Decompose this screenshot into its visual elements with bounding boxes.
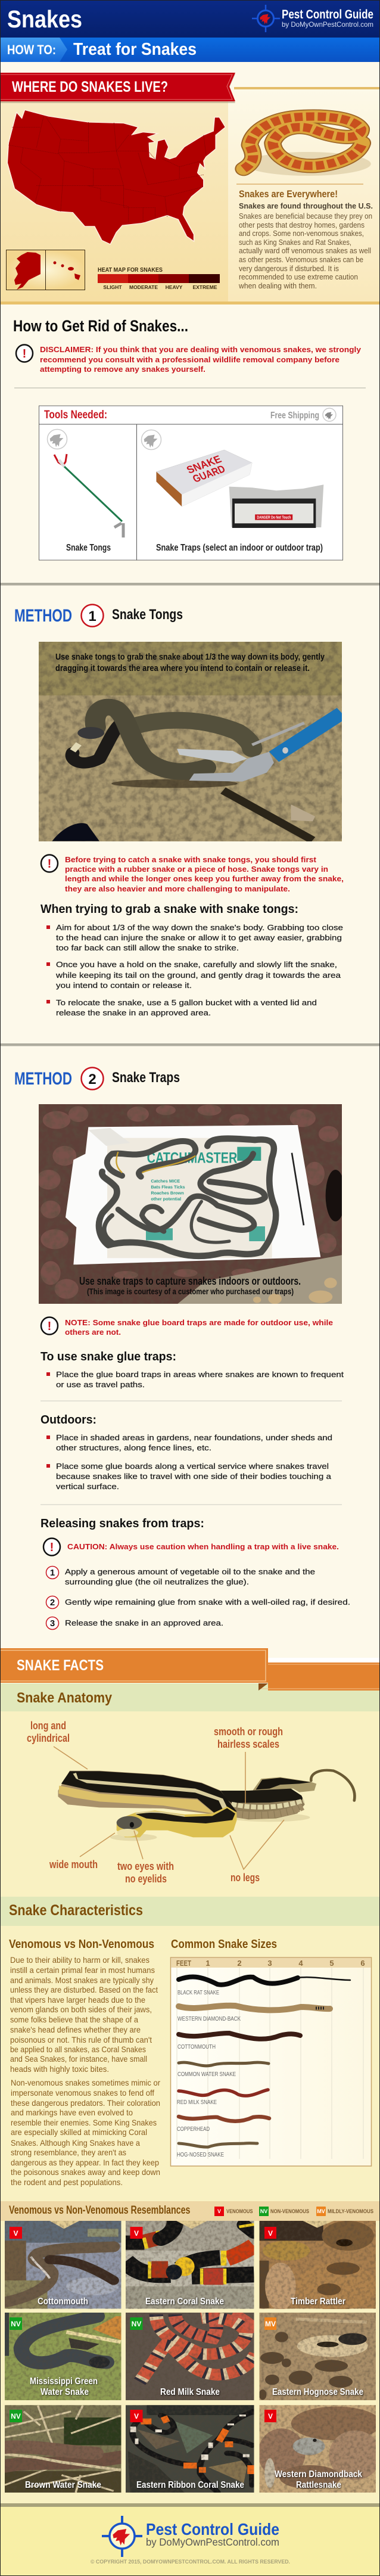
text block: snakes are everywhere: actually ward off venomous snakes as well: [239, 247, 371, 255]
photo: eastern coral snake: [126, 2221, 254, 2309]
footer: [0, 2503, 380, 2576]
disclaimer: [16, 344, 362, 374]
chart axis: feet: FEET: [176, 1959, 191, 1968]
legend: heat map: [98, 266, 220, 290]
disclaimer: attempting to remove any snakes yourself.: [40, 365, 205, 374]
text block: venomous vs non-venomous: resemble their enemies. Some King Snakes: [11, 2118, 157, 2127]
heading ribbon: snake facts: SNAKE FACTS: [17, 1657, 104, 1674]
legend: heat map: MODERATE: [129, 284, 158, 290]
text block: snakes are everywhere: when dealing with them.: [238, 282, 317, 290]
text block: venomous vs non-venomous: Due to their ability to harm or kill, snakes: [10, 1955, 149, 1965]
photo: snake glue trap: CATCHMASTER: [147, 1149, 237, 1166]
callouts: anatomy labels: no legs: [231, 1872, 260, 1884]
snake bar: hog-nosed snake: [177, 2143, 257, 2158]
panel: tools needed: Snake Traps (select an indoor or outdoor trap): [156, 543, 323, 553]
logo: footer: Pest Control Guide: [146, 2520, 279, 2538]
callouts: anatomy labels: cylindrical: [27, 1732, 70, 1744]
panel: tools needed: [39, 406, 343, 560]
method 1 heading: [14, 604, 183, 627]
callouts: anatomy labels: long and: [30, 1720, 66, 1732]
body: [58, 1771, 305, 1819]
photo caption: (This image is courtesy of a customer who purchased our traps): [87, 1287, 294, 1296]
chart axis: feet: 4: [298, 1959, 303, 1968]
text block: venomous vs non-venomous: and Sea Snakes, for instance, have small: [10, 2054, 147, 2064]
text block: releasing snakes: 1: [50, 1568, 55, 1578]
chart axis: feet: 2: [237, 1959, 242, 1968]
photo: brown water snake: NV: [11, 2412, 21, 2420]
legend: heat map: SLIGHT: [103, 284, 122, 290]
text block: venomous vs non-venomous: dangerous as they appear. In fact they keep: [11, 2158, 159, 2167]
snake bar: red milk snake: [177, 2090, 268, 2106]
photo: snake glue trap: Roaches Brown: [151, 1190, 184, 1195]
panel: snake characteristics: Snake Characteristics: [9, 1902, 143, 1919]
text block: snakes are everywhere: such as King Snakes and Rat Snakes,: [239, 238, 351, 247]
callouts: anatomy labels: two eyes with: [117, 1860, 174, 1872]
text block: snakes are everywhere: very dangerous if disturbed. It is: [239, 265, 339, 273]
heading: snake anatomy: Snake Anatomy: [17, 1690, 113, 1706]
text block: releasing snakes: Gently wipe remaining glue from snake with a well-oiled rag, if desired.: [65, 1598, 350, 1606]
photo caption: Use snake traps to capture snakes indoors or outdoors.: [79, 1275, 301, 1287]
text block: tongs instructions: release the snake in an approved area.: [56, 1008, 211, 1017]
chart axis: feet: 3: [267, 1959, 272, 1968]
photo: brown water snake: Brown Water Snake: [25, 2480, 101, 2490]
chart axis: feet: 1: [205, 1959, 210, 1968]
head and neck: [117, 1807, 236, 1837]
text block: venomous vs non-venomous: [10, 1955, 160, 2187]
text block: outdoors: [41, 1413, 332, 1491]
text block: releasing snakes: surrounding glue (the oil neutralizes the glue).: [65, 1577, 249, 1586]
text block: to use glue traps: [41, 1350, 344, 1389]
panel: tools needed: Tools Needed:: [44, 409, 107, 421]
panel: snake characteristics: Common Snake Sizes: [171, 1938, 277, 1951]
snake bar: common water snake: COMMON WATER SNAKE: [177, 2071, 236, 2078]
method 2 heading: Snake Traps: [112, 1070, 180, 1086]
heading ribbon: snake facts: [0, 1648, 380, 1691]
icon: free shipping seal: [323, 408, 336, 421]
text block: venomous vs non-venomous: and markings have even evolved to: [11, 2108, 133, 2117]
photo: timber rattler: Timber Rattler: [291, 2297, 345, 2307]
text block: outdoors: Outdoors:: [41, 1413, 96, 1427]
text block: venomous vs non-venomous: venom glands on both sides of their jaws,: [10, 2005, 152, 2014]
photo: red milk snake: Red Milk Snake: [160, 2387, 220, 2397]
disclaimer: recommend you consult with a professional wildlife removal company before: [40, 355, 339, 364]
text block: venomous vs non-venomous: poisonous or not. This rule of thumb can't: [10, 2035, 152, 2044]
product: snake trap box and bag: [157, 450, 323, 528]
text block: venomous vs non-venomous: be applied to all snakes, as Coral Snakes: [10, 2044, 146, 2054]
text block: snakes are everywhere: Snakes are beneficial because they prey on: [239, 212, 372, 220]
header bar: [0, 0, 380, 38]
snake bar: red milk snake: RED MILK SNAKE: [177, 2099, 217, 2106]
photo: snake glue trap: Bats Fleas Ticks: [151, 1184, 185, 1189]
copyright: © COPYRIGHT 2015, DOMYOWNPESTCONTROL.COM. ALL RIGHTS RESERVED.: [91, 2559, 290, 2565]
text block: releasing snakes: Apply a generous amount of vegetable oil to the snake and the: [65, 1567, 315, 1576]
photo: eastern coral snake: V: [134, 2229, 139, 2238]
photo: cottonmouth: [5, 2221, 122, 2309]
snake bar: western diamond-back: WESTERN DIAMOND-BACK: [177, 2016, 241, 2022]
snake bar: cottonmouth: COTTONMOUTH: [177, 2044, 216, 2050]
text block: venomous vs non-venomous: Non-venomous snakes sometimes mimic or: [11, 2078, 160, 2087]
text block: releasing snakes: Releasing snakes from traps:: [41, 1517, 204, 1530]
snake bar: common water snake: [177, 2062, 269, 2078]
product: snake trap box and bag: SNAKE: [185, 453, 224, 476]
text block: releasing snakes: 3: [50, 1618, 55, 1629]
logo: footer: by DoMyOwnPestControl.com: [146, 2536, 279, 2548]
photo: red milk snake: [126, 2313, 256, 2400]
panel: where do snakes live: [0, 73, 380, 304]
legend: NV: [260, 2208, 267, 2214]
photo caption: [79, 1275, 301, 1296]
how-to bar: [0, 38, 380, 62]
warning: practice: they are also heavier and more challenging to manipulate.: [65, 884, 290, 893]
text block: to use glue traps: To use snake glue traps:: [41, 1350, 176, 1363]
text block: venomous vs non-venomous: the rodent and pest populations.: [11, 2177, 123, 2187]
photo: eastern ribbon coral snake: V: [134, 2412, 139, 2420]
callouts: anatomy labels: wide mouth: [49, 1859, 98, 1870]
method 1 heading: Snake Tongs: [112, 607, 183, 623]
photo: eastern coral snake: Eastern Coral Snake: [145, 2297, 224, 2307]
text block: to use glue traps: or use as travel paths.: [56, 1380, 145, 1389]
text block: releasing snakes: CAUTION: Always use caution when handling a trap with a live snake.: [67, 1542, 339, 1551]
method 1 heading: 1: [88, 608, 96, 624]
panel: snake characteristics: [0, 1897, 380, 2507]
note: glue board traps: [41, 1317, 333, 1337]
callouts: anatomy labels: no eyelids: [125, 1873, 167, 1885]
panel: tools needed: Snake Tongs: [66, 543, 111, 553]
photo: snake glue trap: other potential: [151, 1196, 181, 1201]
text block: venomous vs non-venomous: the poisonous snakes away and keep down: [11, 2167, 160, 2177]
warning: practice: [41, 854, 344, 893]
photo: eastern hognose snake: [259, 2313, 376, 2400]
panel: snake anatomy: [0, 1648, 380, 1897]
warning: practice: length and while the longer ones keep you further away from the snake,: [65, 874, 344, 883]
legend: heat map: EXTREME: [192, 284, 217, 290]
photo: timber rattler: V: [268, 2229, 273, 2238]
photo: western diamondback rattlesnake: Rattlesnake: [296, 2480, 341, 2490]
photo: eastern ribbon coral snake: [126, 2405, 254, 2493]
text block: outdoors: Place some glue boards along a vertical service where snakes travel: [56, 1462, 329, 1471]
text block: venomous vs non-venomous: snake's head defines whether they are: [10, 2025, 141, 2034]
legend: heat map: HEAT MAP FOR SNAKES: [98, 266, 163, 274]
snake bar: black rat snake: BLACK RAT SNAKE: [177, 1990, 219, 1996]
icon: seal traps: [142, 430, 161, 449]
product: snake trap box and bag: DANGER Do Not Touch: [257, 515, 291, 520]
note: glue board traps: others are not.: [65, 1328, 121, 1337]
icon: seal tongs: [48, 429, 67, 449]
photo: western diamondback rattlesnake: Western Diamondback: [275, 2469, 362, 2479]
photo: mississippi green water snake: Water Snake: [41, 2387, 89, 2397]
legend: MV: [317, 2208, 325, 2214]
photo: snake glue trap: Catches MICE: [151, 1179, 180, 1184]
title: Snakes: [7, 5, 82, 33]
text block: venomous vs non-venomous: are especially skilled at mimicking Coral: [11, 2127, 147, 2137]
photo: eastern hognose snake: MV: [265, 2320, 276, 2328]
text block: snakes are everywhere: recommended to use extreme caution: [239, 273, 358, 281]
text block: tongs instructions: while keeping its tail on the ground, and gently drag it towards the area: [55, 971, 341, 980]
photo caption: dragging it towards the area where you intend to contain or release it.: [55, 663, 310, 673]
text block: tongs instructions: Once you have a hold on the snake, carefully and slowly lift the snake,: [56, 960, 337, 969]
warning: practice: practice with a rubber snake or a piece of hose. Snake tongs vary in: [65, 865, 328, 874]
photo: red milk snake: NV: [132, 2320, 141, 2328]
chart axis: feet: 5: [329, 1959, 334, 1968]
text block: releasing snakes: 2: [50, 1598, 55, 1608]
text block: outdoors: Place in shaded areas in gardens, near foundations, under sheds and: [56, 1433, 332, 1442]
image: garter snake: [58, 1770, 354, 1841]
photo: eastern hognose snake: Eastern Hognose Snake: [272, 2387, 363, 2397]
text block: venomous vs non-venomous: unless they are disturbed. Based on the fact: [10, 1985, 158, 1994]
text block: venomous vs non-venomous: some folks believe that the shape of a: [10, 2015, 138, 2024]
how-to bar: Treat for Snakes: [73, 40, 197, 59]
text block: venomous vs non-venomous: heads with highly toxic bites.: [10, 2064, 109, 2074]
method 2 heading: 2: [88, 1071, 96, 1087]
text block: tongs instructions: To relocate the snake, use a 5 gallon bucket with a vented lid and: [56, 998, 317, 1007]
photo caption: [55, 652, 325, 673]
legend: NON-VENOMOUS: [270, 2208, 309, 2215]
photo: western diamondback rattlesnake: [258, 2405, 380, 2493]
legend: heat map: HEAVY: [166, 284, 183, 290]
callouts: anatomy labels: smooth or rough: [214, 1726, 283, 1738]
legend: VENOMOUS: [226, 2208, 253, 2215]
text block: tongs instructions: to the head can injure the snake or allow it to get away easier, grabbing: [56, 933, 342, 942]
heading ribbon: [0, 73, 235, 103]
map: united states: [7, 110, 226, 244]
text block: to use glue traps: Place the glue board traps in areas where snakes are known to frequent: [56, 1370, 344, 1379]
logo: pest control guide: [252, 5, 373, 32]
callouts: anatomy labels: hairless scales: [217, 1738, 279, 1750]
snake bar: copperhead: [177, 2117, 269, 2133]
text block: tongs instructions: too far back can still allow the snake to strike.: [56, 943, 239, 952]
legend: [214, 2207, 373, 2216]
text block: tongs instructions: you intend to contain or release it.: [56, 981, 192, 990]
text block: releasing snakes: Release the snake in an approved area.: [65, 1618, 223, 1627]
chart axis: feet: [176, 1959, 365, 1968]
text block: outdoors: vertical surface.: [56, 1482, 119, 1491]
panel: tools needed: Free Shipping: [270, 411, 319, 421]
heading: resemblances with legend: [0, 2201, 380, 2221]
image: corn snake: [244, 117, 371, 176]
text block: outdoors: other structures, along fence lines, etc.: [56, 1443, 211, 1452]
snake bar: copperhead: COPPERHEAD: [177, 2126, 210, 2133]
photo: cottonmouth: Cottonmouth: [38, 2297, 88, 2307]
photo: cottonmouth: V: [13, 2229, 18, 2238]
text block: venomous vs non-venomous: and animals. Most snakes are typically shy: [10, 1975, 154, 1985]
how-to bar: HOW TO:: [7, 42, 56, 57]
method 2 heading: [14, 1068, 180, 1089]
panel: snake characteristics: Venomous vs Non-Venomous: [9, 1938, 154, 1951]
callouts: anatomy labels: [27, 1720, 284, 1885]
method 2 heading: METHOD: [14, 1069, 72, 1089]
warning: practice: Before trying to catch a snake with snake tongs, you should first: [65, 855, 317, 864]
heading ribbon: WHERE DO SNAKES LIVE?: [12, 79, 168, 95]
text block: venomous vs non-venomous: strong resemblance, they aren't as: [11, 2148, 126, 2157]
note: glue board traps: NOTE: Some snake glue board traps are made for outdoor use, while: [65, 1318, 333, 1327]
disclaimer: DISCLAIMER: If you think that you are dealing with venomous snakes, we strongly: [40, 345, 362, 354]
text block: tongs instructions: Aim for about 1/3 of the way down the snake's body. Grabbing too close: [56, 923, 343, 932]
method 1 heading: METHOD: [14, 606, 72, 626]
text block: venomous vs non-venomous: these dangerous predators. Their coloration: [11, 2098, 160, 2108]
photo: western diamondback rattlesnake: V: [268, 2412, 273, 2420]
chart: common snake sizes: [170, 1957, 372, 2166]
snake bar: hog-nosed snake: HOG-NOSED SNAKE: [177, 2152, 224, 2158]
snake bar: black rat snake: [177, 1977, 350, 1996]
inset: alaska and hawaii: [6, 250, 85, 290]
heading: resemblances with legend: Venomous vs Non-Venomous Resemblances: [9, 2204, 191, 2217]
photo: timber rattler: [259, 2221, 376, 2310]
product: snake trap box and bag: GUARD: [191, 463, 228, 485]
product: snake tongs: [54, 454, 123, 537]
text block: venomous vs non-venomous: instill a certain primal fear in most humans: [10, 1965, 155, 1975]
text block: tongs instructions: When trying to grab a snake with snake tongs:: [41, 903, 298, 916]
text block: snakes are everywhere: as other pests. Venomous snakes can be: [239, 256, 363, 264]
text block: snakes are everywhere: [238, 188, 373, 290]
snake bar: cottonmouth: [177, 2033, 300, 2050]
text block: venomous vs non-venomous: that vipers have larger heads due to the: [10, 1995, 145, 2005]
text block: snakes are everywhere: other pests that destroy homes, gardens: [239, 221, 365, 229]
photo: mississippi green water snake: [5, 2313, 122, 2400]
photo: brown water snake: [5, 2405, 122, 2493]
photo: snake tongs: [39, 642, 342, 841]
photo caption: Use snake tongs to grab the snake about 1/3 the way down its body, gently: [55, 652, 325, 662]
legend: V: [217, 2208, 221, 2214]
photo: eastern ribbon coral snake: Eastern Ribbon Coral Snake: [136, 2480, 244, 2490]
tail coil: [253, 1770, 354, 1801]
chart axis: feet: 6: [360, 1959, 365, 1968]
snake bar: western diamond-back: [177, 2006, 330, 2022]
text block: tongs instructions: [41, 903, 343, 1017]
text block: snakes are everywhere: Snakes are found throughout the U.S.: [239, 201, 373, 210]
text block: releasing snakes: [41, 1517, 350, 1629]
text block: outdoors: because snakes like to travel with one side of their bodies touching a: [56, 1472, 332, 1481]
logo: footer: [102, 2516, 279, 2557]
text block: snakes are everywhere: and crops. Some non-venomous snakes,: [239, 229, 364, 238]
text block: venomous vs non-venomous: impersonate venomous snakes to fend off: [11, 2088, 154, 2098]
logo: pest control guide: by DoMyOwnPestControl.com: [282, 20, 373, 29]
photo: mississippi green water snake: Mississippi Green: [30, 2376, 98, 2387]
photo: snake glue trap: [37, 1104, 345, 1304]
photo: mississippi green water snake: NV: [11, 2320, 21, 2328]
text block: venomous vs non-venomous: Snakes. Although King Snakes have a: [11, 2138, 140, 2148]
text block: snakes are everywhere: Snakes are Everywhere!: [239, 188, 338, 200]
heading: how to get rid of snakes: How to Get Rid of Snakes...: [13, 317, 188, 335]
